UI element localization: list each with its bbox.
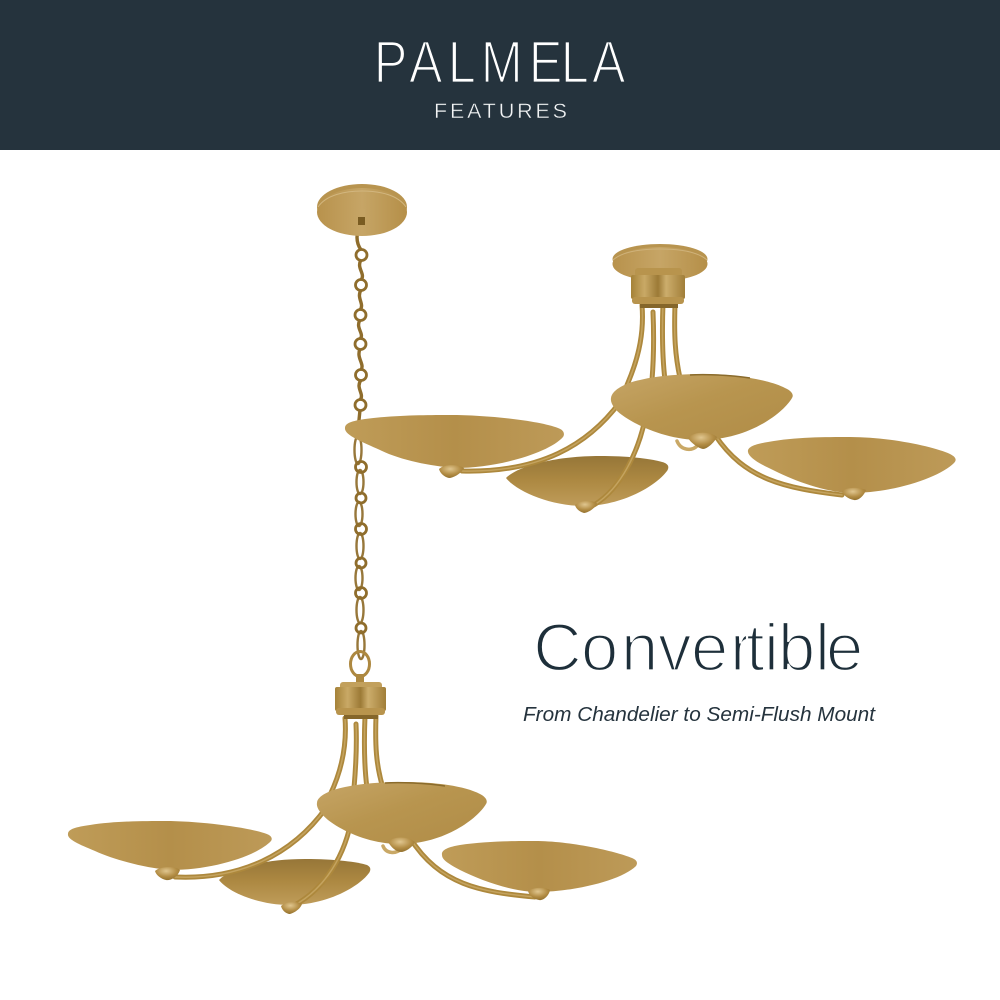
semi-flush configuration — [345, 244, 956, 513]
arms and stems — [175, 716, 535, 906]
central bowl — [317, 782, 487, 844]
rear bowl — [219, 859, 370, 905]
rear bowl — [506, 456, 668, 506]
left bowl — [68, 821, 272, 870]
semi-flush canopy — [612, 244, 708, 281]
stem collar — [335, 682, 386, 719]
right bowl — [442, 841, 637, 892]
subtitle: features: FEATURES — [434, 99, 567, 123]
right bowl — [748, 437, 956, 493]
arm end knobs — [155, 838, 550, 914]
left bowl — [345, 415, 564, 468]
arms and stems — [462, 303, 842, 507]
title: PALMELA — [374, 29, 626, 95]
header band — [0, 0, 1000, 150]
tagline: From Chandelier to Semi-Flush Mount — [523, 704, 876, 726]
heading: Convertible: Convertible — [533, 610, 863, 686]
arm end knobs — [439, 433, 866, 513]
stem collar — [631, 268, 685, 308]
chain — [350, 226, 370, 683]
ceiling canopy — [317, 184, 407, 236]
chandelier configuration — [68, 184, 637, 914]
central bowl — [611, 374, 793, 440]
